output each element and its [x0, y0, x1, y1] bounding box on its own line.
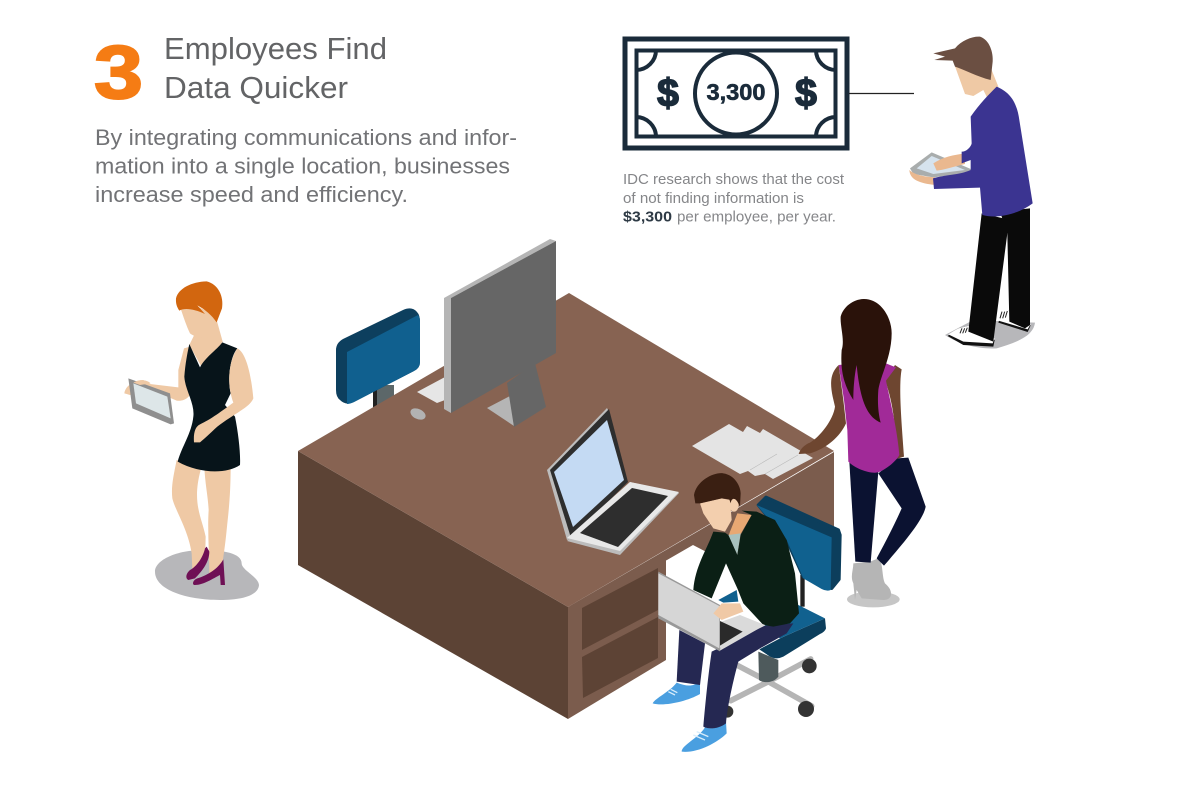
hair	[933, 37, 993, 80]
floor shadow	[155, 550, 259, 600]
legs	[172, 460, 231, 575]
person: woman in purple top	[799, 299, 926, 607]
stacked papers	[692, 424, 813, 479]
jacket	[693, 511, 799, 627]
face and neck	[953, 62, 998, 100]
chair seat	[718, 590, 826, 658]
person: man in blue sweater with tablet	[909, 37, 1035, 348]
arm holding tablet	[124, 347, 192, 401]
hair	[694, 473, 741, 507]
desk top	[298, 293, 834, 607]
other arm	[194, 348, 253, 442]
floor shadow	[945, 320, 1035, 348]
icon: dollar bill: 3,300	[706, 79, 766, 105]
hands	[909, 153, 965, 185]
neck and shirt	[728, 513, 752, 555]
title	[164, 31, 387, 105]
person: seated man in office chair with laptop	[653, 473, 840, 752]
desktop mouse	[409, 406, 427, 422]
callout text: of not finding information is	[623, 191, 804, 207]
purple top	[839, 362, 899, 473]
dress	[178, 342, 240, 471]
ear	[729, 498, 739, 512]
trousers	[968, 208, 1030, 342]
shoes	[653, 682, 727, 752]
title: Data Quicker	[164, 70, 348, 105]
desk rear panel	[568, 452, 834, 607]
trousers	[677, 623, 793, 728]
title: Employees Find	[164, 31, 387, 66]
section number: 3	[94, 30, 143, 114]
open laptop on desk	[547, 408, 679, 555]
callout text: $3,300	[623, 210, 672, 226]
desk left face	[298, 451, 568, 719]
arm on far side	[885, 365, 904, 459]
ankle boots	[852, 558, 891, 600]
callout text: per employee, per year.	[677, 210, 836, 226]
drawer unit	[568, 551, 666, 719]
callout text	[623, 172, 844, 226]
sneakers	[948, 310, 1031, 347]
heels	[186, 547, 225, 585]
tablet	[910, 152, 972, 177]
intro text block: By integrating communications and infor-	[95, 125, 517, 150]
sweater	[933, 87, 1033, 217]
callout text: IDC research shows that the cost	[623, 172, 844, 188]
icon: dollar bill: $	[795, 72, 817, 115]
face	[700, 498, 732, 532]
icon: dollar bill	[625, 39, 847, 148]
arm leaning on desk	[799, 365, 846, 454]
long hair	[841, 299, 892, 423]
chair post	[800, 575, 805, 607]
desktop keyboard	[417, 377, 445, 403]
chair base	[721, 652, 817, 718]
desktop monitor	[444, 239, 556, 427]
floor shadow	[847, 591, 900, 607]
leggings	[849, 458, 926, 566]
intro text block	[95, 125, 517, 207]
tablet	[128, 378, 174, 424]
icon: dollar bill: $	[657, 72, 679, 115]
connector line	[849, 92, 914, 94]
intro text block: mation into a single location, businesses	[95, 154, 510, 178]
neck	[189, 320, 223, 370]
chair backrest	[757, 497, 840, 591]
lap laptop	[658, 572, 765, 651]
desk	[298, 293, 834, 719]
hair	[176, 281, 222, 322]
far chair back	[336, 308, 420, 415]
hands	[713, 603, 743, 620]
face	[180, 303, 217, 338]
person: woman in black dress with tablet	[124, 281, 259, 600]
intro text block: increase speed and efficiency.	[95, 182, 408, 207]
